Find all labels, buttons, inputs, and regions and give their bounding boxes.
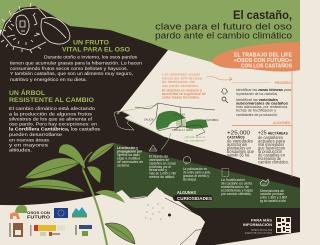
text: proceso items — [236, 88, 291, 117]
stat: 25000 castanos — [227, 130, 255, 158]
curiosity: seleccion: de variedades de — [117, 160, 143, 164]
heading: algunas curiosidades: ALGUNAS — [177, 190, 196, 195]
forest patches — [156, 111, 208, 130]
stat: 35 hectareas: +25 HECTÁREAS — [258, 130, 288, 136]
heading: el trabajo del life: «OSOS CON FUTURO» — [234, 58, 292, 64]
stat: 25000 castanos: de variedades — [227, 138, 253, 144]
connector line and note — [161, 133, 206, 150]
text: proceso items: más adecuadas, por resistencia, — [236, 105, 288, 109]
heading: el trabajo del life: CON LOS CASTAÑOS — [241, 62, 293, 70]
curiosity: fructificacion — [221, 178, 253, 196]
leaf — [95, 190, 125, 203]
leaf — [25, 158, 80, 178]
curiosity: seleccion: injertos ha dado — [117, 153, 140, 157]
leaf — [87, 166, 101, 183]
text: proceso items: Identificar las zonas idóneas para — [236, 88, 291, 92]
bear eye — [168, 214, 171, 216]
stat: 35 hectareas: actuales para — [258, 138, 286, 144]
text: un fruto body: consumiendo frutos secos como bellotas y hayucos. — [10, 66, 128, 72]
title — [155, 10, 292, 42]
map labels: CANTABRIA — [205, 119, 219, 122]
text: proceso items: cantidades de producción. — [236, 113, 278, 117]
curiosity: altitud: castaños en zonas — [149, 162, 176, 166]
text: un fruto body: nutritivo y energético en su dieta. — [10, 77, 87, 83]
curiosity: seleccion: propagación por — [117, 150, 143, 154]
heading: algunas curiosidades: CURIOSIDADES — [177, 196, 212, 201]
curiosity: seleccion: lugar a multitud — [117, 156, 140, 160]
curiosity: altitud — [149, 154, 176, 179]
text: arbol body: altitudes. — [9, 148, 32, 154]
leaf — [105, 223, 135, 244]
stat: 35 hectareas: la producción — [258, 149, 283, 154]
text: proceso items: Identificar las variedades — [236, 98, 278, 102]
curiosity: seleccion: La selección y — [117, 146, 138, 150]
text: orange intro: El objetivo es mejorar y — [162, 88, 203, 92]
curiosity: seleccion — [117, 146, 143, 168]
curiosity: seleccion: castaños. — [117, 164, 130, 168]
panel: green header — [0, 0, 300, 62]
text: orange intro: de distribución del — [162, 79, 195, 84]
map borders — [135, 103, 215, 136]
bear fur marks — [145, 204, 164, 219]
stat: 35 hectareas: escenarios de — [258, 156, 282, 161]
stat: 35 hectareas: cambio climático. — [258, 160, 289, 164]
text: un fruto body: tienen que acumular grasas para la hibernación. Lo hacen — [10, 60, 142, 66]
curiosity: polinizacion — [183, 167, 211, 182]
heading: un arbol resistente — [9, 88, 94, 104]
map labels: CASTILLA Y LEÓN — [172, 129, 193, 132]
stat: 35 hectareas: de castañares — [258, 135, 283, 140]
plant: chestnut branch — [18, 143, 135, 245]
map labels — [144, 114, 219, 132]
title: El castaño, — [233, 10, 292, 22]
text: arbol body: en nuevas áreas — [9, 138, 50, 144]
text: orange intro — [162, 72, 207, 100]
panel: green curiosities band — [114, 143, 300, 208]
curiosity: polinizacion: La polinización es — [183, 167, 207, 171]
text: arbol body: silvestres de los que se alimenta el — [9, 116, 92, 122]
stat: 35 hectareas: de castañas en — [258, 152, 286, 158]
text: orange intro: menos del 10% del área — [162, 76, 203, 80]
arrow: orange squiggle — [207, 77, 232, 81]
stat: 35 hectareas — [258, 130, 289, 164]
logo: osos con futuro — [10, 205, 51, 220]
curiosity: altitud: desarrollo y — [149, 168, 167, 172]
text: para mas informacion: PARA MÁS — [251, 218, 273, 222]
curiosity: produccion: entre 1.800 y 3.800 — [260, 196, 287, 200]
text: orange intro: estas masas forestales. — [162, 94, 200, 100]
text: para mas informacion: fundacionoso.org — [251, 228, 273, 232]
icon: magnifier — [222, 97, 228, 103]
text: un fruto body: Durante otoño e invierno, los osos pardos — [44, 54, 138, 60]
curiosity: polinizacion: de entre junio y julio, — [183, 170, 211, 174]
title: clave para el futuro del oso — [155, 22, 292, 32]
curiosity: produccion — [260, 189, 287, 203]
map labels: GALICIA — [144, 118, 154, 122]
curiosity: polinizacion: gracias al viento y — [183, 174, 209, 178]
text: arbol body: a la producción de algunos frutos — [9, 112, 93, 118]
curiosity: altitud: metros de altitud. — [149, 175, 175, 179]
map labels: ASTURIAS — [173, 114, 185, 116]
curiosity: polinizacion: las abejas. — [183, 178, 197, 182]
text: orange intro: aumentar la superficie de — [162, 91, 207, 96]
text: para mas informacion — [243, 218, 273, 234]
text: arbol body: oso pardo. Pero hay excepciones: en — [9, 122, 97, 128]
label: proceso: PROCESO — [275, 81, 292, 85]
text: orange intro: Los castañares ocupan — [162, 72, 200, 76]
qr code — [276, 217, 291, 233]
panel: cream bear head — [0, 187, 205, 245]
curiosity: altitud: El mundo del — [149, 154, 168, 158]
stat: 25000 castanos: plantados en — [227, 146, 252, 150]
connector line and note: oso cantábrico? — [184, 138, 206, 142]
icon: pollen — [183, 156, 191, 165]
curiosity: fructificacion: La fructificación — [221, 178, 245, 182]
text: proceso items: fechas de fructificación y — [236, 108, 276, 112]
logos: sponsor row — [9, 223, 92, 237]
map: cone and spain outline — [114, 103, 219, 137]
text: un fruto body — [10, 54, 142, 83]
stat: 25000 castanos: bosquetes que — [227, 149, 255, 154]
logo: osos con futuro: OSOS CON — [27, 210, 50, 215]
title: pardo ante el cambio climático — [155, 30, 292, 42]
heading: el trabajo del life — [234, 52, 293, 70]
curiosity: produccion: castaño produce — [260, 192, 284, 196]
text: para mas informacion: proyecto life osos con futuro — [245, 232, 273, 234]
label: acciones: ACCIONES — [273, 121, 290, 125]
illustration: chestnut burr — [1, 3, 70, 53]
curiosity: fructificacion: estabilización de — [221, 185, 249, 189]
heading: un fruto vital — [62, 40, 130, 54]
leaf — [59, 144, 85, 169]
leaf veins — [18, 143, 135, 244]
stat: 25000 castanos: +25.000 — [227, 130, 250, 136]
panel: orange work header — [211, 42, 300, 72]
icon: grid — [222, 168, 228, 176]
curiosity: altitud: próximas por el — [149, 165, 171, 169]
stat: 35 hectareas: mal manejados — [258, 142, 284, 147]
text: arbol body: pueden desarrollarse — [9, 132, 62, 138]
stat: 25000 castanos: autóctonas — [227, 142, 247, 147]
text: proceso items: subcomarcales de castaños — [236, 102, 288, 106]
bear outline — [130, 196, 205, 245]
heading: el trabajo del life: EL TRABAJO DEL LIFE — [234, 52, 293, 58]
leaf — [18, 179, 85, 192]
icon: tree person — [221, 88, 228, 94]
text: orange intro: oso pardo cantábrico. — [162, 83, 199, 88]
text: arbol body: y en mayores — [9, 142, 49, 148]
logo: osos con futuro: FUTURO — [27, 214, 51, 220]
text: arbol body: El cambio climático está afectando — [9, 106, 95, 112]
connector line and note: ¿Dónde vive el — [184, 135, 205, 139]
curiosity: fructificacion: por cambio climático. — [221, 192, 252, 196]
stat: 25000 castanos: CASTAÑOS — [227, 134, 245, 140]
label: proceso — [232, 81, 292, 85]
logo: natura mountains — [72, 207, 87, 218]
curiosity: altitud: variedades de — [149, 158, 169, 162]
vertical orange rule — [232, 68, 292, 177]
curiosity: produccion: kg de castaña al año — [260, 199, 286, 203]
heading: algunas curiosidades — [173, 190, 213, 201]
text: para mas informacion: INFORMACIÓN — [243, 222, 272, 227]
curiosity: altitud: más de 1.000-1.780 — [149, 172, 176, 176]
stat: 35 hectareas: que favorezcan — [258, 146, 286, 150]
text: arbol body: la Cordillera Cantábrica, los castaños — [9, 126, 101, 132]
leaf — [88, 143, 115, 163]
heading: un fruto vital: UN FRUTO — [73, 40, 109, 46]
heading: un fruto vital: VITAL PARA EL OSO — [62, 46, 130, 54]
stat: 25000 castanos: suman 55 ha. — [227, 152, 250, 158]
curiosity: fructificacion: del castaño es cierta — [221, 182, 252, 186]
heading: un arbol resistente: UN ÁRBOL — [9, 88, 45, 97]
text: arbol body — [9, 106, 101, 154]
curiosity: produccion: Dimensiones de — [260, 189, 284, 193]
text: un fruto body: Y también castañas, que son un alimento muy seguro, — [10, 71, 133, 77]
curiosity: fructificacion: ecosistemas y bajas — [221, 188, 253, 192]
heading: un arbol resistente: RESISTENTE AL CAMBIO — [9, 97, 94, 104]
text: proceso items: la plantación de los castaños. — [236, 92, 278, 96]
icon: chestnuts — [260, 179, 269, 186]
icon: mountain — [149, 145, 157, 151]
logo: eu life — [54, 208, 68, 218]
